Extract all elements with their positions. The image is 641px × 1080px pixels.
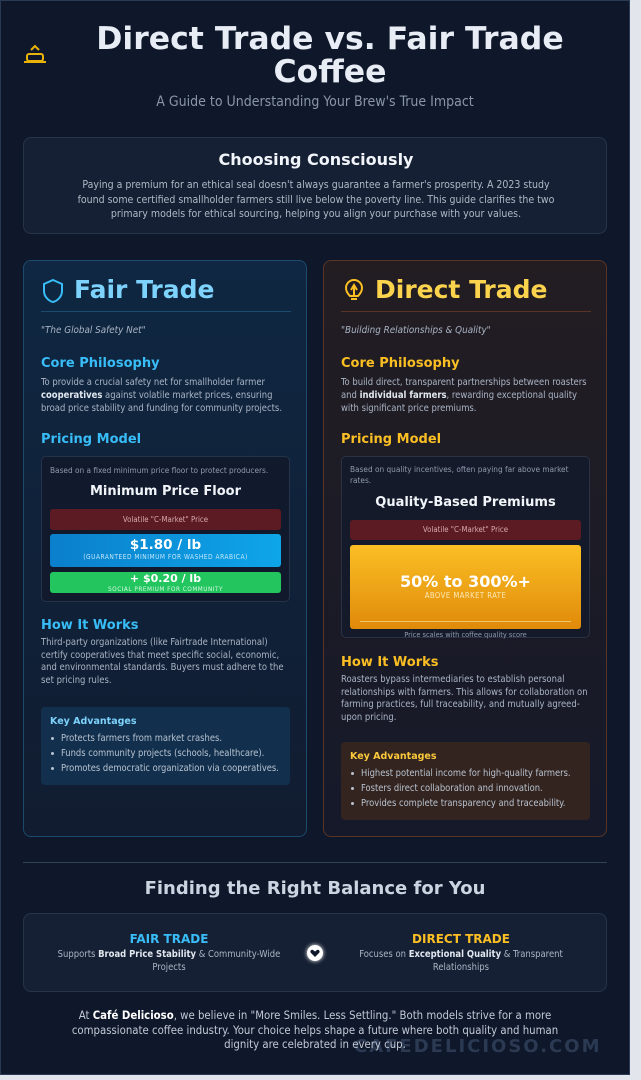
heading: Fair Trade: Fair Trade [74,275,214,304]
key advantages [341,742,590,820]
panel: direct trade [323,260,607,837]
direct trade summary [359,932,563,973]
how it works: Roasters bypass intermediaries to establish personal relationships with farmers. This allows for collaboration on farming practices, full traceability, and mutually agreed-upon pricing. [341,674,588,723]
core philosophy: Core Philosophy [341,356,460,371]
quote: "Building Relationships & Quality" [341,325,491,336]
direct trade summary: DIRECT TRADE [412,932,510,946]
how it works: How It Works [341,655,439,670]
quote: "The Global Safety Net" [41,325,146,336]
heading: finding balance: Finding the Right Balance for You [145,878,485,899]
core philosophy: To provide a crucial safety net for smallholder farmer cooperatives against volatile market prices, ensuring broad price stability and funding for community projects. [41,377,282,414]
heading: Direct Trade: Direct Trade [375,275,547,304]
key advantages [41,707,290,785]
key advantages: Key Advantages [50,716,137,727]
core philosophy [341,356,587,414]
watermark: CAFEDELICIOSO.COM [354,1036,601,1057]
pricing chart: minimum price floor: (GUARANTEED MINIMUM FOR WASHED ARABICA) [83,553,248,561]
how it works: How It Works [41,618,139,633]
key advantages: Highest potential income for high-quality farmers. [361,768,571,779]
icon: shield [43,278,63,303]
pricing chart: quality premiums: 50% to 300%+ [400,572,531,591]
core philosophy [41,356,282,414]
key advantages: Funds community projects (schools, healthcare). [61,748,264,759]
footer text: At Café Delicioso, we believe in "More Smiles. Less Settling." Both models strive for a more compassionate coffee industry. Your choice helps shape a future where both quality and human dignity are celebrated in every cup. [72,1009,558,1051]
pricing chart: quality premiums: ABOVE MARKET RATE [425,591,506,600]
core philosophy: To build direct, transparent partnerships between roasters and individual farmers, rewarding exceptional quality with significant price premiums. [341,377,587,414]
pricing chart: quality premiums: Volatile "C-Market" Price [423,525,508,534]
intro panel [23,137,607,234]
key advantages: Protects farmers from market crashes. [61,733,222,744]
panel: fair trade [23,260,307,837]
pricing chart: minimum price floor [41,456,290,602]
key advantages: Key Advantages [350,751,437,762]
how it works: Third-party organizations (like Fairtrade International) certify cooperatives that meet specific social, economic, and environmental standards. Buyers must adhere to the set pricing rules. [41,637,284,686]
pricing chart: minimum price floor: Minimum Price Floor [90,484,241,499]
fair trade summary: Supports Broad Price Stability & Community-Wide Projects [58,949,280,973]
key advantages: Promotes democratic organization via cooperatives. [61,763,279,774]
intro heading: Choosing Consciously [218,150,413,169]
key advantages: Provides complete transparency and traceability. [361,798,565,809]
pricing chart: minimum price floor: + $0.20 / lb [130,572,201,585]
pricing model heading: Pricing Model [41,432,141,447]
pricing chart: quality premiums: Price scales with coffee quality score [404,630,527,639]
direct trade summary: Focuses on Exceptional Quality & Transparent Relationships [359,949,563,973]
intro text: Paying a premium for an ethical seal doesn't always guarantee a farmer's prosperity. A 2023 study found some certified smallholder farmers still live below the poverty line. This guide clarifies the two primary models for ethical sourcing, helping you align your purchase with your values. [78,179,554,220]
fair trade summary: FAIR TRADE [130,932,208,946]
icon: lightbulb [345,279,363,300]
subtitle: A Guide to Understanding Your Brew's True Impact [156,94,474,110]
title: Coffee [273,54,386,90]
pricing chart: minimum price floor: Volatile "C-Market" Price [123,515,208,524]
panel: balance summary [23,913,607,992]
fair trade summary [58,932,280,973]
title: Direct Trade vs. Fair Trade [96,21,564,57]
core philosophy: Core Philosophy [41,356,160,371]
pricing chart: minimum price floor: SOCIAL PREMIUM FOR COMMUNITY [108,585,223,593]
pricing chart: minimum price floor: $1.80 / lb [130,537,201,553]
pricing chart: quality premiums [341,456,590,638]
icon: coffee cup [24,44,46,63]
icon: heart [307,945,323,961]
key advantages: Fosters direct collaboration and innovation. [361,783,543,794]
pricing model heading: Pricing Model [341,432,441,447]
title [96,21,564,90]
pricing chart: quality premiums: Quality-Based Premiums [375,495,556,510]
pricing chart: minimum price floor: Based on a fixed minimum price floor to protect producers. [50,465,268,475]
pricing chart: quality premiums: Based on quality incentives, often paying far above market rates. [350,464,568,484]
